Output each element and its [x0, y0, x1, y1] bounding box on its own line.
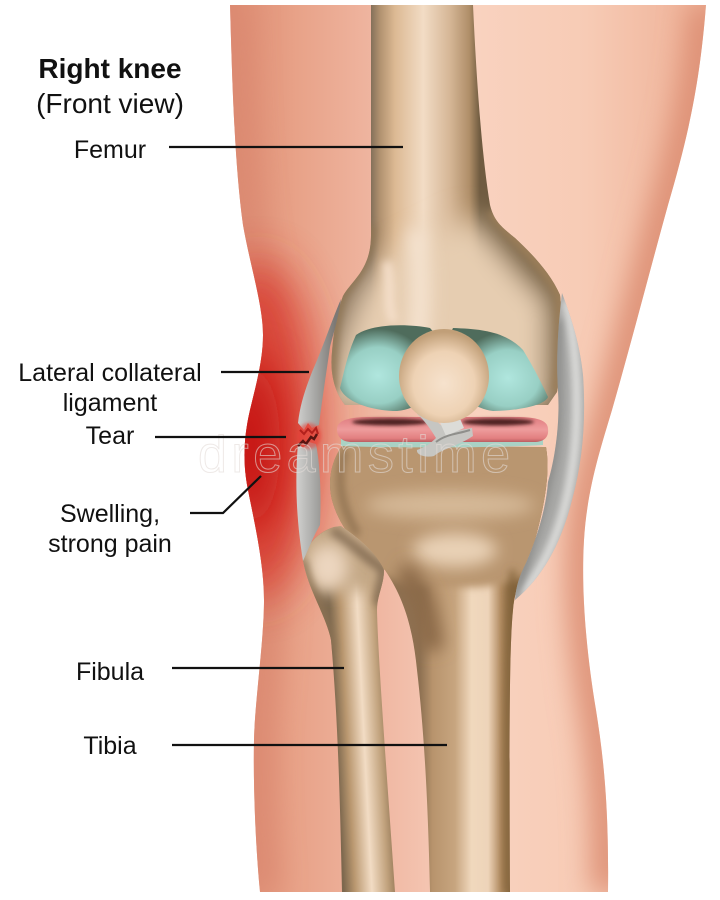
label: fibula: Fibula	[76, 658, 144, 686]
label: tibia: Tibia	[83, 732, 137, 760]
title: Right knee	[38, 53, 182, 84]
medial femoral cartilage	[445, 328, 548, 411]
label: tear: Tear	[86, 422, 134, 450]
label: swelling, strong pain	[48, 476, 261, 558]
ligament tear	[297, 423, 321, 449]
medial collateral ligament	[515, 293, 584, 600]
medial meniscus	[451, 417, 548, 442]
femur	[325, 0, 570, 410]
tibia	[330, 446, 548, 892]
swelling redness	[196, 260, 320, 600]
title: (Front view)	[36, 88, 184, 119]
cruciate ligaments	[417, 410, 473, 457]
watermark: dreamstime	[198, 426, 510, 484]
label: swelling, strong pain: Swelling,	[60, 500, 160, 528]
lateral meniscus	[337, 417, 437, 442]
patella	[399, 329, 489, 423]
lateral femoral cartilage	[340, 325, 445, 411]
title	[36, 53, 184, 119]
label: femur: Femur	[74, 136, 146, 164]
leg skin silhouette	[196, 0, 715, 900]
label: lateral collateral ligament	[18, 359, 309, 417]
label: lateral collateral ligament: ligament	[63, 389, 157, 417]
label: lateral collateral ligament: Lateral collateral	[18, 359, 202, 387]
tibial cartilage plate	[341, 439, 543, 447]
lateral collateral ligament, lower part	[296, 442, 321, 561]
lateral collateral ligament, upper part	[298, 299, 341, 430]
fibula	[303, 526, 395, 892]
label: swelling, strong pain: strong pain	[48, 530, 172, 558]
